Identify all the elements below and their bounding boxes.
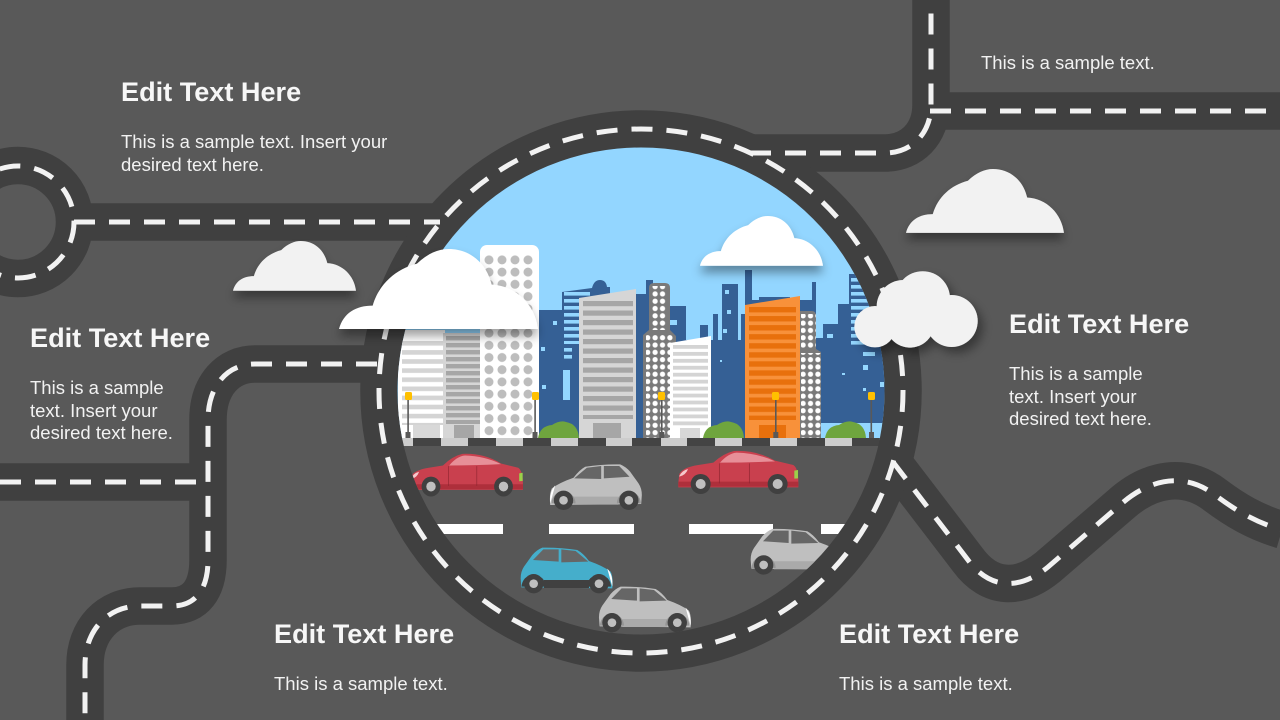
white office building xyxy=(670,336,711,438)
text block: right: desired text here. xyxy=(1009,408,1152,429)
grey office building xyxy=(579,289,636,438)
road surface xyxy=(404,447,878,634)
kerb strip xyxy=(386,438,890,446)
street lamps xyxy=(405,392,875,439)
text block: top right: This is a sample text. xyxy=(981,52,1155,73)
city scene inside the ring xyxy=(386,140,890,646)
grey striped building xyxy=(443,333,480,438)
cloud: small left xyxy=(233,241,356,291)
orange building xyxy=(745,296,800,438)
cloud: over sky xyxy=(700,216,823,266)
text block: top left: desired text here. xyxy=(121,154,264,175)
text block: right: This is a sample xyxy=(1009,363,1143,384)
text block: bottom centre-left: Edit Text Here xyxy=(274,618,454,649)
skyline windows xyxy=(541,277,884,400)
car: silver middle xyxy=(550,464,642,510)
text block: left: This is a sample xyxy=(30,377,164,398)
text block: top left: Edit Text Here xyxy=(121,76,301,107)
text block: top left xyxy=(121,76,387,175)
cloud: large over ring xyxy=(339,249,538,329)
car: silver bottom xyxy=(599,587,691,632)
text block: right: Edit Text Here xyxy=(1009,308,1189,339)
text block: bottom centre-right: This is a sample text. xyxy=(839,673,1013,694)
text block: bottom centre-right: Edit Text Here xyxy=(839,618,1019,649)
text block: bottom centre-right xyxy=(839,618,1019,694)
tall white dotted building xyxy=(480,245,539,445)
car: blue xyxy=(521,548,613,593)
cloud: round right xyxy=(854,271,978,348)
dark grey tower xyxy=(643,283,676,438)
text block: left: desired text here. xyxy=(30,422,173,443)
cloud: top right xyxy=(906,169,1064,233)
lane markings xyxy=(437,524,851,534)
text block: bottom centre-left: This is a sample text. xyxy=(274,673,448,694)
dark blue skyline xyxy=(539,270,885,438)
text block: bottom centre-left xyxy=(274,618,454,694)
text block: left: text. Insert your xyxy=(30,400,158,421)
text block: left xyxy=(30,322,210,443)
left white building xyxy=(398,330,445,438)
text block: right xyxy=(1009,308,1189,429)
text block: top left: This is a sample text. Insert your xyxy=(121,131,387,152)
right dotted tower xyxy=(800,311,821,438)
car: silver right xyxy=(750,528,829,574)
bushes xyxy=(538,421,866,438)
car: red right xyxy=(678,451,798,494)
text block: left: Edit Text Here xyxy=(30,322,210,353)
sky xyxy=(390,140,890,440)
car: red left xyxy=(410,454,523,496)
text block: right: text. Insert your xyxy=(1009,386,1136,407)
